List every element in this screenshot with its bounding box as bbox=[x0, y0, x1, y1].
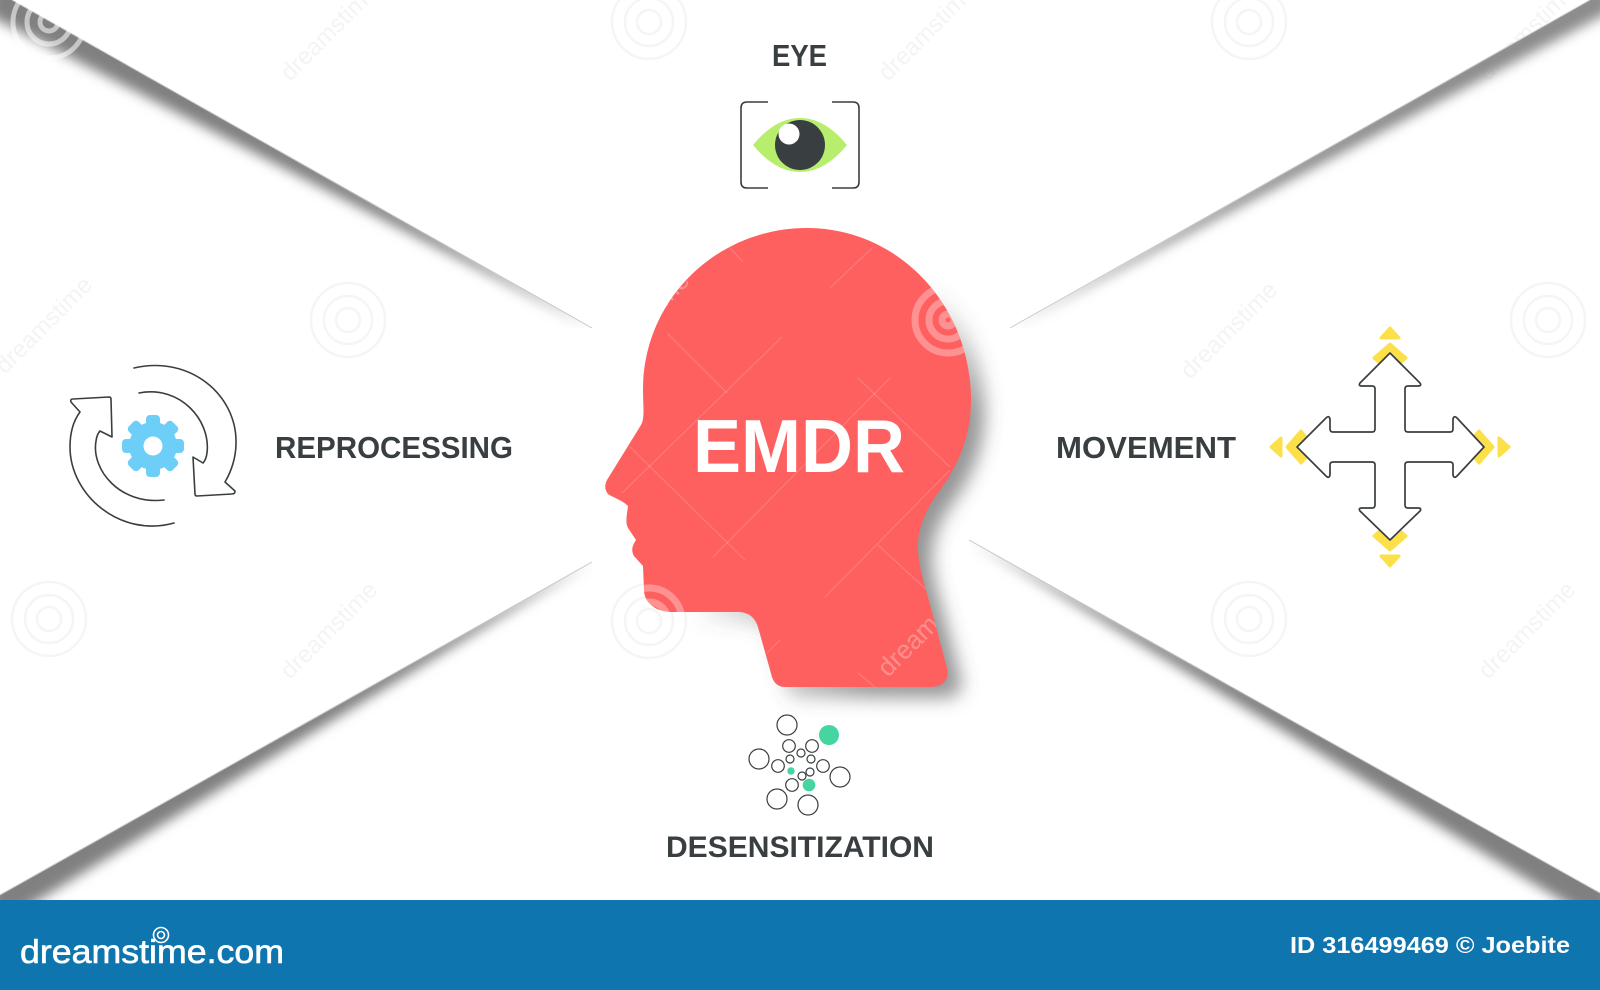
icon: gear bbox=[122, 415, 184, 477]
watermark spirals and text: dreamstime bbox=[275, 576, 383, 684]
label: MOVEMENT: MOVEMENT bbox=[1056, 430, 1236, 465]
watermark spiral over top-left divider bbox=[13, 0, 85, 58]
watermark spirals and text bbox=[0, 0, 1585, 684]
central head silhouette: dreamstime bbox=[871, 565, 988, 682]
central head silhouette: dreamstime bbox=[578, 265, 695, 382]
icon: reprocessing arrows and gear bbox=[70, 366, 236, 526]
icon: dreamstime spiral bbox=[154, 928, 168, 942]
divider: top left bbox=[0, 0, 592, 328]
divider: bottom left bbox=[0, 562, 592, 930]
central head silhouette bbox=[605, 228, 971, 687]
label: EYE: EYE bbox=[772, 38, 827, 73]
footer band bbox=[0, 900, 1600, 990]
footer image id and author: ID 316499469 © Joebite bbox=[1290, 932, 1570, 958]
label: DESENSITIZATION: DESENSITIZATION bbox=[666, 831, 934, 864]
icon: desensitization circles bbox=[749, 715, 850, 815]
title: EMDR: EMDR bbox=[693, 404, 905, 488]
footer brand: dreamstime.com: dreamstime.com bbox=[20, 933, 284, 970]
divider: top right bbox=[1010, 0, 1600, 328]
label: REPROCESSING: REPROCESSING bbox=[275, 430, 513, 465]
icon: eye in viewfinder bbox=[741, 102, 859, 188]
icon: four-way arrows bbox=[1271, 328, 1509, 566]
watermark spirals and text: dreamstime bbox=[1473, 576, 1581, 684]
watermark spirals and text: dreamstime bbox=[1175, 276, 1283, 384]
divider: bottom right bbox=[969, 540, 1600, 930]
head shadow bbox=[619, 239, 985, 698]
